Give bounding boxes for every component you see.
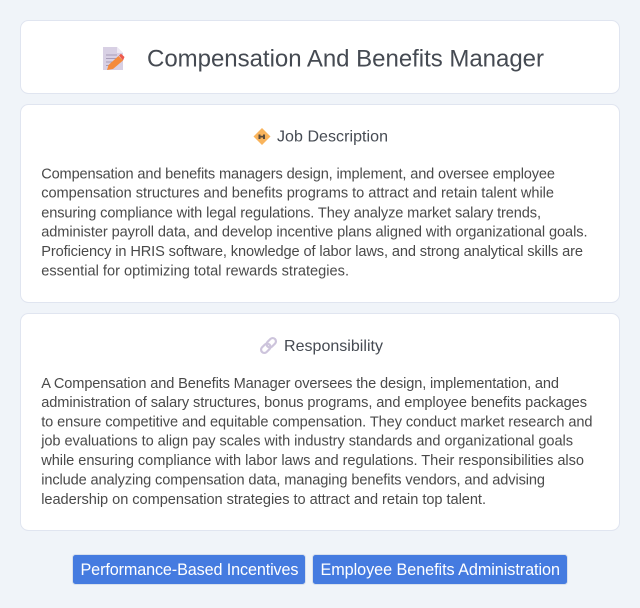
text block: responsibility: while ensuring compliance with labor laws and regulations. Their responsibilities also: [40, 453, 584, 469]
text block: responsibility: leadership on compensation strategies to attract and retain top talent.: [41, 492, 486, 508]
tag: performance-based incentives: Performance-Based Incentives: [80, 561, 298, 579]
tag: employee benefits administration: Employee Benefits Administration: [320, 561, 560, 579]
text block: job description: compensation structures and benefits programs to attract and retain talent while: [41, 186, 554, 202]
text block: responsibility: include analyzing compensation data, managing benefits vendors, and advising: [41, 472, 545, 488]
heading: responsibility: Responsibility: [284, 338, 383, 355]
text block: responsibility: to ensure competitive and equitable compensation. They conduct market research and: [41, 414, 592, 430]
panel: responsibility: [20, 314, 620, 530]
text block: job description: Compensation and benefits managers design, implement, and oversee employee: [41, 166, 555, 182]
text block: job description: essential for optimizing total rewards strategies.: [41, 264, 349, 280]
tag: performance-based incentives: [72, 554, 306, 584]
icon: diamond badge: [254, 128, 270, 145]
text block: job description: administer payroll data, and develop incentive plans aligned with organizational goals.: [41, 224, 587, 240]
title: Compensation And Benefits Manager: [147, 46, 544, 72]
text block: responsibility: A Compensation and Benefits Manager oversees the design, implementation, and: [41, 376, 559, 392]
text block: job description: ensuring compliance with legal regulations. They analyze market salary trends,: [41, 206, 541, 222]
icon: chain link: [260, 337, 277, 354]
text block: responsibility: administration of salary structures, bonus programs, and employee benefits packages: [41, 395, 587, 411]
text block: responsibility: [40, 376, 592, 508]
tag: employee benefits administration: [312, 554, 568, 584]
text block: job description: [41, 166, 587, 280]
panel: title header: [20, 20, 620, 94]
panel: job description: [20, 104, 620, 302]
heading: job description: Job Description: [277, 128, 388, 146]
icon: document with pencil: [103, 47, 124, 70]
text block: job description: Proficiency in HRIS software, knowledge of labor laws, and strong analytical skills are: [41, 244, 583, 260]
text block: responsibility: job evaluations to align pay scales with industry standards and organizational goals: [40, 434, 573, 450]
